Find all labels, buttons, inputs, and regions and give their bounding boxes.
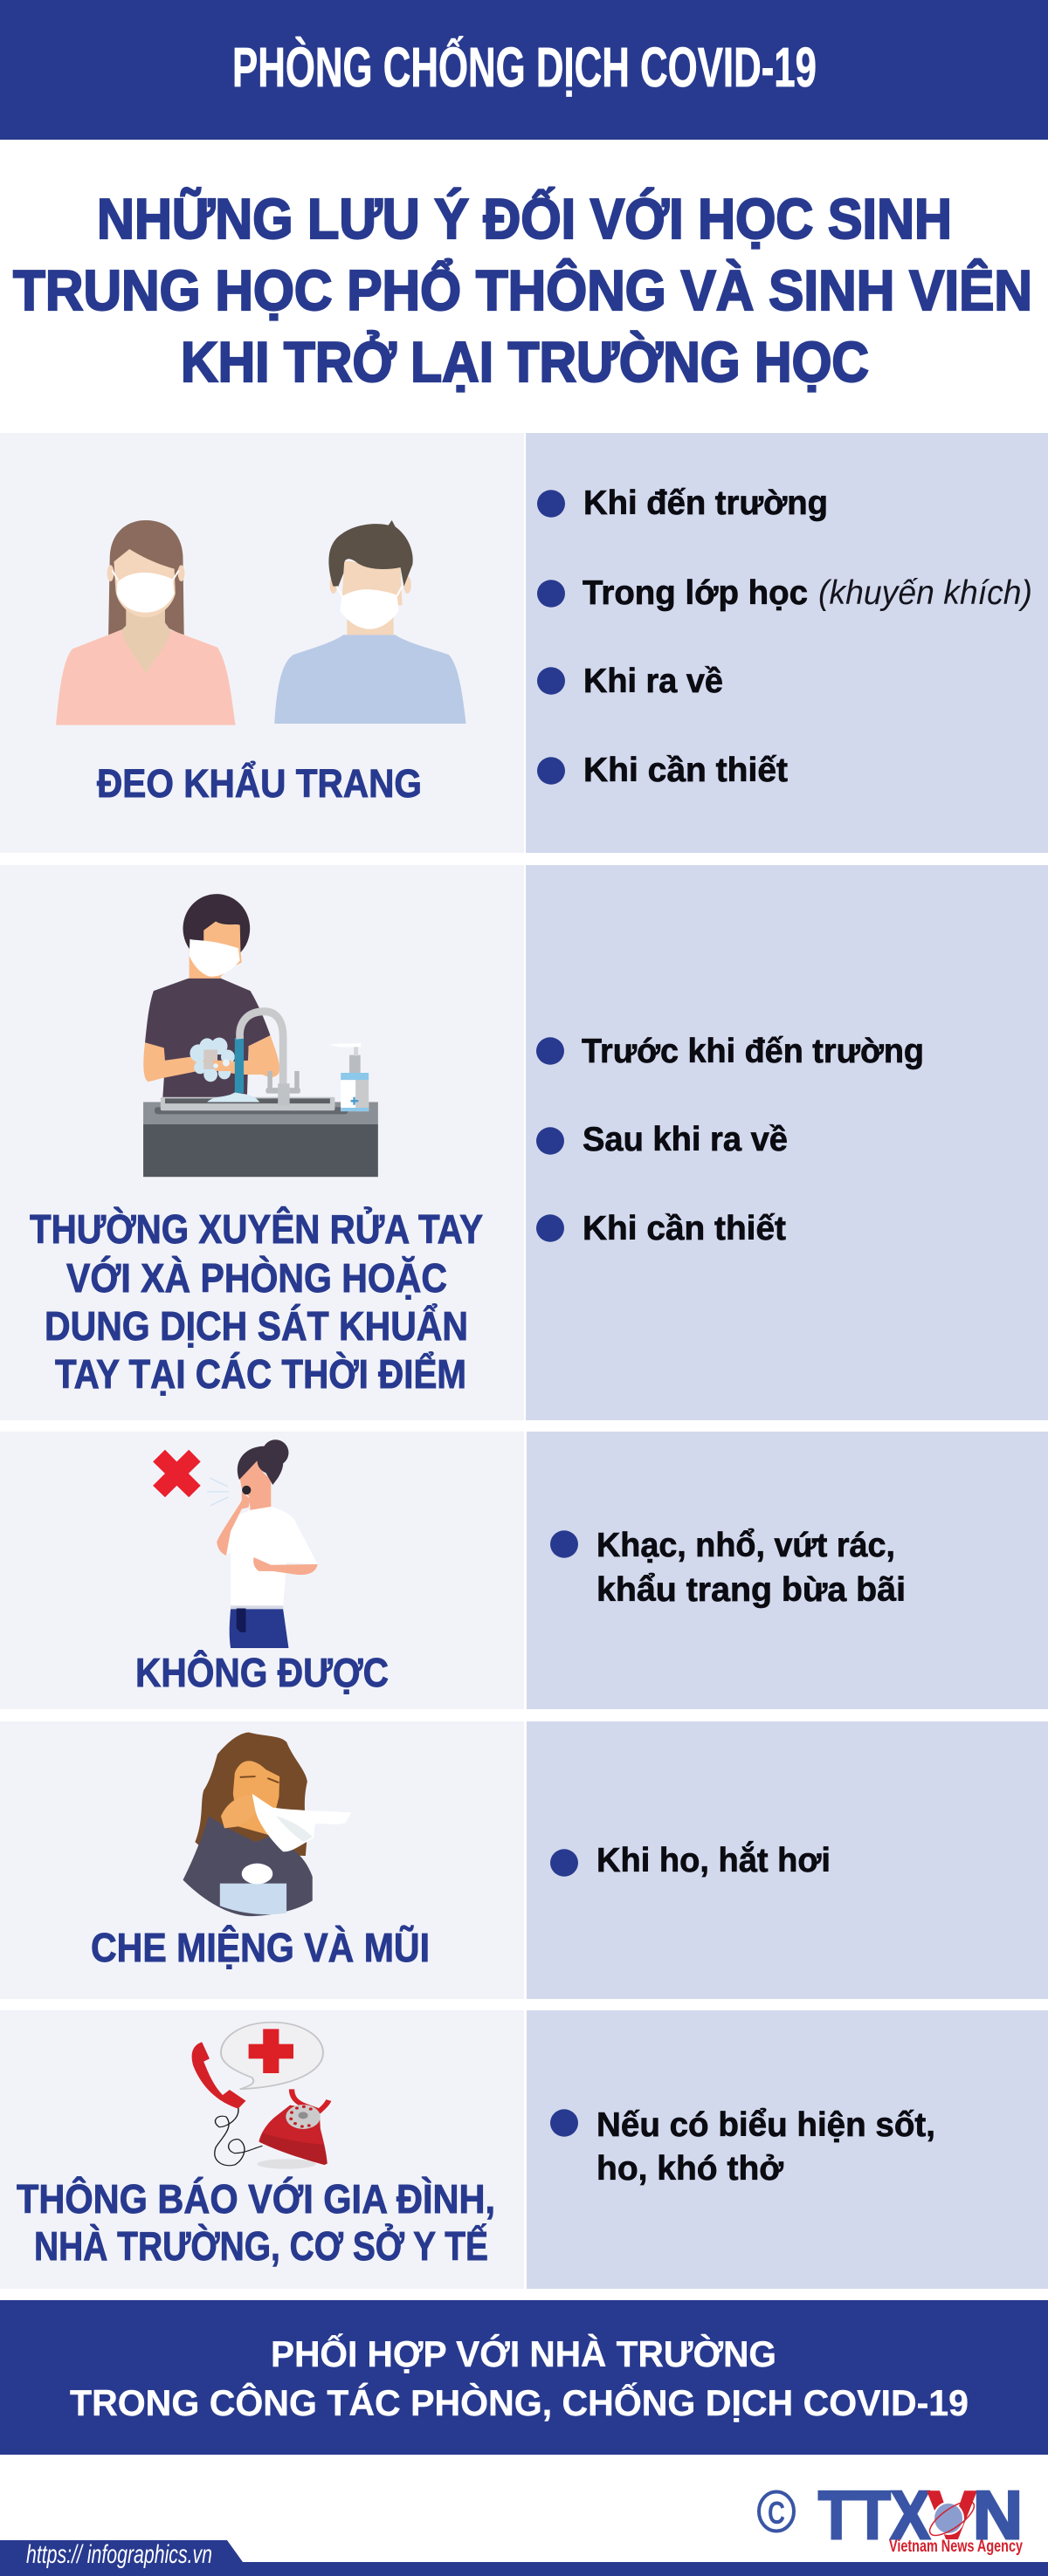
- footer banner: [0, 2300, 1048, 2455]
- website tab: [0, 2540, 1048, 2576]
- panel: when to wear a mask: Khi ra về: [583, 663, 723, 700]
- panel: when to wash hands: Trước khi đến trường: [582, 1033, 924, 1070]
- heading: wear a mask: ĐEO KHẨU TRANG: [97, 761, 422, 806]
- panel: when to wash hands: [526, 865, 1048, 1420]
- title: KHI TRỞ LẠI TRƯỜNG HỌC: [181, 330, 869, 394]
- heading: do not: KHÔNG ĐƯỢC: [135, 1650, 389, 1695]
- panel: symptoms: ho, khó thở: [596, 2150, 783, 2188]
- icon: person washing hands at sink: [143, 894, 378, 1177]
- panel: when to wear a mask: Trong lớp học: [583, 574, 808, 612]
- panel: wear a mask: [0, 433, 524, 853]
- heading: notify: NHÀ TRƯỜNG, CƠ SỞ Y TẾ: [34, 2223, 488, 2269]
- panel: cover mouth and nose: [0, 1721, 524, 1999]
- header banner: [0, 0, 1048, 140]
- heading: wash hands: DUNG DỊCH SÁT KHUẨN: [45, 1303, 468, 1349]
- panel: do not: [0, 1432, 524, 1709]
- website tab: https:// infographics.vn: [26, 2540, 212, 2569]
- icon: coughing woman with red cross mark: [153, 1439, 318, 1648]
- panel: wash hands: [0, 865, 524, 1420]
- heading: wash hands: VỚI XÀ PHÒNG HOẶC: [66, 1255, 447, 1301]
- panel: what is forbidden: [527, 1432, 1048, 1709]
- title: [13, 187, 1032, 394]
- heading: wash hands: TAY TẠI CÁC THỜI ĐIỂM: [55, 1351, 466, 1397]
- heading: wash hands: THƯỜNG XUYÊN RỬA TAY: [30, 1206, 483, 1252]
- panel: when to wear a mask: (khuyến khích): [818, 574, 1032, 612]
- footer banner: TRONG CÔNG TÁC PHÒNG, CHỐNG DỊCH COVID-19: [70, 2381, 969, 2423]
- heading: wash hands: [30, 1206, 483, 1397]
- panel: when to wash hands: Sau khi ra về: [583, 1121, 788, 1158]
- panel: what is forbidden: Khạc, nhổ, vứt rác,: [596, 1527, 895, 1564]
- icon: red telephone with medical speech bubble: [192, 2023, 328, 2169]
- panel: when to wash hands: Khi cần thiết: [583, 1210, 786, 1247]
- panel: when to wear a mask: Khi đến trường: [583, 484, 828, 522]
- heading: cover mouth and nose: CHE MIỆNG VÀ MŨI: [91, 1925, 430, 1970]
- footer banner: PHỐI HỢP VỚI NHÀ TRƯỜNG: [271, 2332, 776, 2374]
- panel: when to wear a mask: [526, 433, 1048, 853]
- title: NHỮNG LƯU Ý ĐỐI VỚI HỌC SINH: [97, 187, 952, 251]
- logo: copyright and TTXVN: TTX: [818, 2476, 930, 2553]
- heading: notify: [17, 2176, 495, 2269]
- panel: when to wear a mask: Khi cần thiết: [583, 752, 788, 789]
- heading: notify: THÔNG BÁO VỚI GIA ĐÌNH,: [17, 2176, 495, 2222]
- icon: woman sneezing into tissue: [183, 1732, 351, 1916]
- logo: copyright and TTXVN: V: [927, 2476, 976, 2553]
- icon: woman and man wearing masks: [56, 520, 466, 725]
- panel: symptoms: [527, 2010, 1048, 2289]
- logo: copyright and TTXVN: N: [973, 2476, 1023, 2553]
- panel: when to cover: [527, 1721, 1048, 1999]
- panel: what is forbidden: khẩu trang bừa bãi: [596, 1571, 906, 1609]
- panel: when to cover: Khi ho, hắt hơi: [596, 1841, 831, 1879]
- panel: notify: [0, 2010, 524, 2289]
- logo: copyright and TTXVN: C: [768, 2495, 785, 2531]
- panel: symptoms: Nếu có biểu hiện sốt,: [596, 2106, 935, 2144]
- logo: copyright and TTXVN: [759, 2476, 1023, 2556]
